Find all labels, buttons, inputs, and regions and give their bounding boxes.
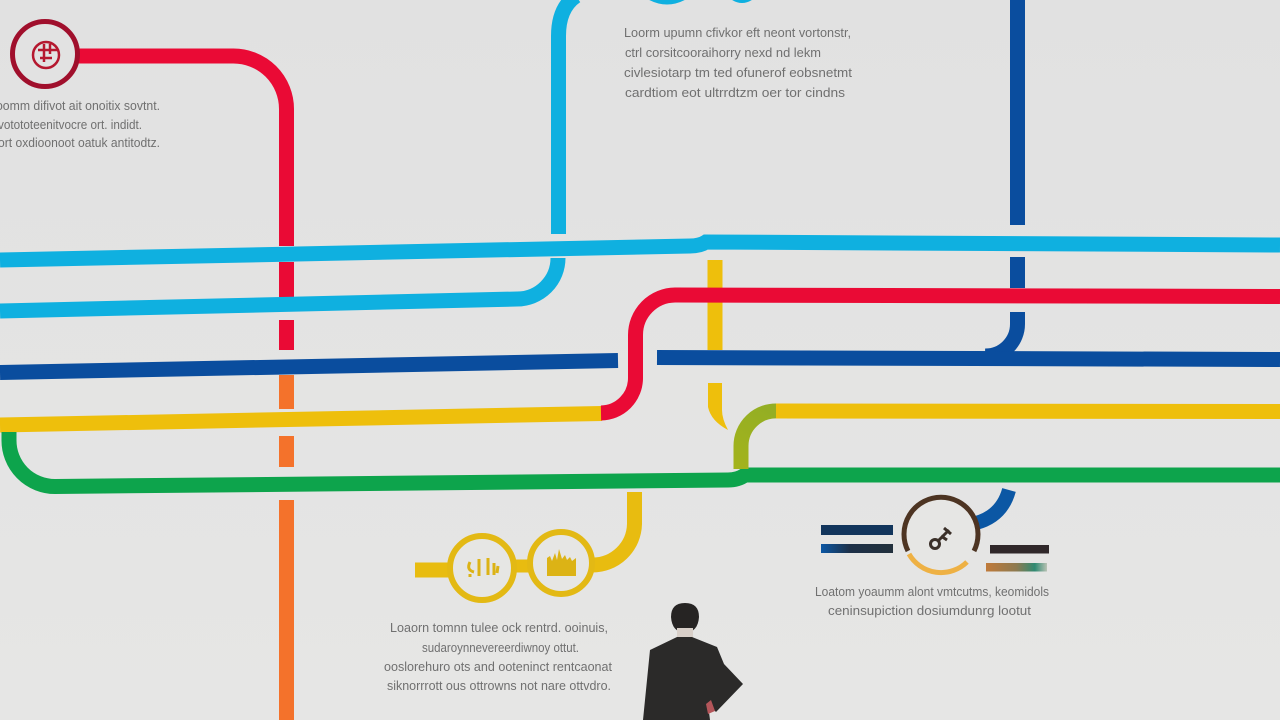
cyan lower line with bend <box>0 258 558 311</box>
text block: right: Loatom yoaumm alont vmtcutms, keomidols <box>815 585 1049 599</box>
station: red circle icon <box>12 22 78 86</box>
text block: bottom centre: siknorrrott ous ottrowns not nare ottvdro. <box>387 679 611 693</box>
legend bars: right pair <box>986 545 1049 572</box>
text block: top centre <box>624 26 853 100</box>
text block: top centre: ctrl corsitcooraihorry nexd nd lekm <box>625 46 821 60</box>
cyan upper horizontal line <box>0 242 1280 260</box>
icon: red glyph <box>33 42 59 68</box>
navy horizontal line right <box>657 358 1280 360</box>
navy horizontal line left <box>0 360 618 372</box>
text block: top centre: Loorm upumn cfivkor eft neont vortonstr, <box>624 26 851 40</box>
text block: top left: oomm difivot ait onoitix sovtnt. <box>0 99 160 113</box>
text block: right <box>815 585 1049 618</box>
yellow tapered stub <box>708 383 728 430</box>
text block: bottom centre <box>384 621 613 693</box>
text block: top centre: civlesiotarp tm ted ofunerof eobsnetmt <box>624 66 853 80</box>
text block: top left: ort oxdioonoot oatuk antitodtz. <box>0 136 160 150</box>
yellow route with two station circles <box>415 492 634 600</box>
icon: yellow bar chart <box>547 549 576 576</box>
person suit body <box>643 637 743 720</box>
text block: top centre: cardtiom eot ultrrdtzm oer tor cindns <box>625 86 845 100</box>
station: right yellow circle <box>530 532 592 594</box>
navy arc into brown station <box>976 490 1009 523</box>
yellow horizontal line right <box>776 404 1280 419</box>
station: left yellow circle <box>450 536 514 600</box>
cyan vertical top segment <box>558 0 576 234</box>
yellow horizontal line left <box>0 414 602 425</box>
olive bend joining yellow line <box>741 411 778 469</box>
person hand <box>706 700 715 714</box>
person silhouette <box>643 603 743 720</box>
icon: wrench glyph <box>930 528 951 548</box>
yellow vertical line <box>708 260 728 430</box>
text block: bottom centre: ooslorehuro ots and ooteninct rentcaonat <box>384 660 613 674</box>
text block: right: ceninsupiction dosiumdunrg lootut <box>828 604 1032 618</box>
green line <box>9 432 1280 486</box>
person neck and collar <box>677 628 693 639</box>
station: brown and amber ring <box>904 497 978 573</box>
text block: bottom centre: sudaroynnevereerdiwnoy ottut. <box>422 641 579 655</box>
icon: yellow tools glyph <box>469 558 498 577</box>
text block: top left: votototeenitvocre ort. indidt. <box>0 118 142 132</box>
person head <box>671 603 699 633</box>
navy vertical line <box>985 0 1018 356</box>
red line: vertical route from top-left station <box>76 56 286 350</box>
red line: S-bend to right <box>601 295 1280 413</box>
text block: top left <box>0 99 160 150</box>
legend bars: left pair <box>821 525 893 553</box>
cyan arcs at top edge <box>650 0 751 2</box>
text block: bottom centre: Loaorn tomnn tulee ock rentrd. ooinuis, <box>390 621 608 635</box>
orange line: lower vertical segments <box>279 375 294 720</box>
